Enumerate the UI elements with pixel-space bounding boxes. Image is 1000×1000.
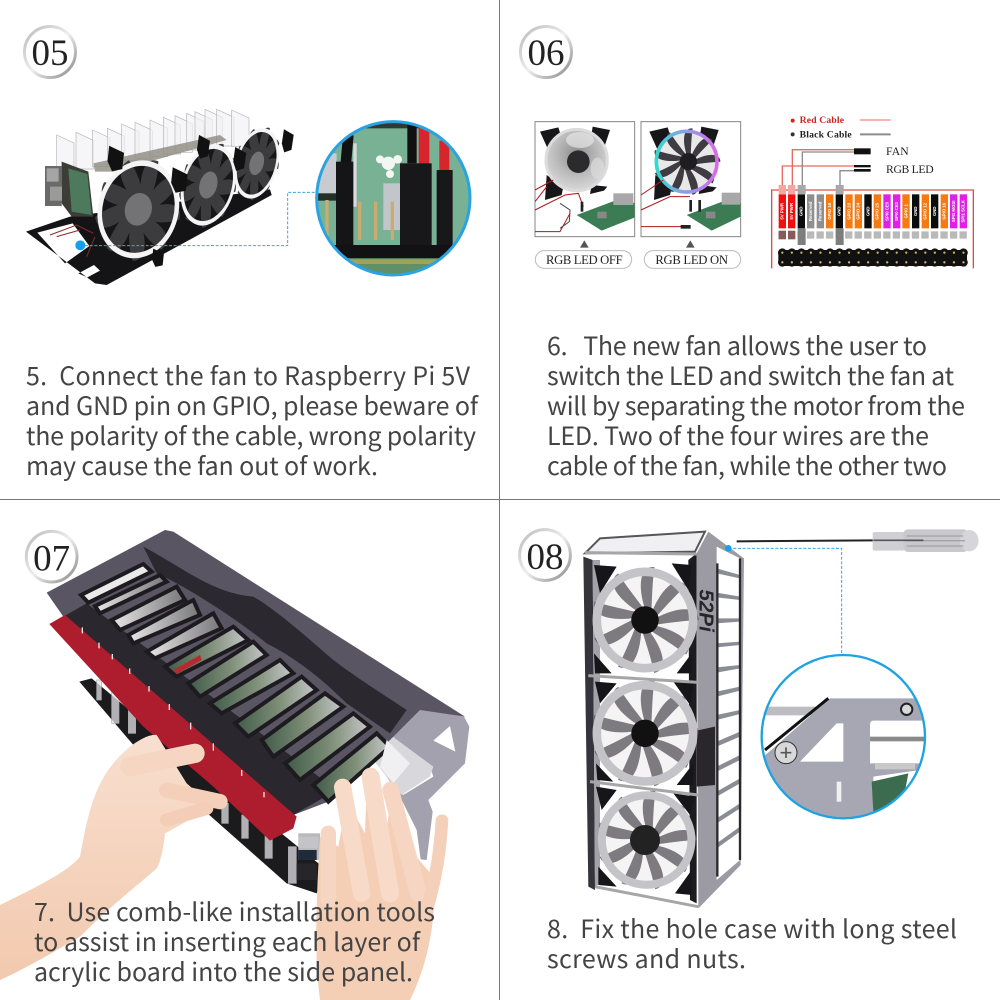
- tower front frame: [583, 532, 707, 907]
- GPIO pin label columns: GND: [932, 207, 937, 216]
- USB ports: [298, 837, 318, 860]
- dark translucent top side panel: [47, 530, 465, 815]
- lighter side panel end with cut-outs: [387, 703, 469, 860]
- fan 1: [81, 144, 196, 273]
- badge 08: 08: [527, 537, 563, 578]
- GPIO pin label columns: GPIO 12: [923, 202, 928, 220]
- step 8 text: screws and nuts.: [547, 940, 746, 976]
- photo frame: LED on: [641, 122, 741, 237]
- inset circle: fan connectors on GPIO pins: [317, 120, 473, 280]
- connector: RGB LED: [854, 163, 934, 176]
- step 7 text: [34, 893, 435, 989]
- cables by the base: [50, 225, 95, 257]
- GPIO pin label columns: GND: [913, 207, 918, 216]
- label: RGB LED OFF: RGB LED OFF: [546, 253, 623, 267]
- GPIO header pins: [778, 250, 967, 266]
- photo: tower and screwdriver: [520, 529, 979, 908]
- red board detail: [173, 655, 202, 674]
- comb pins: [82, 627, 264, 797]
- fan top: [591, 564, 701, 675]
- fan bottom hub: [630, 825, 660, 855]
- photo: assembled cluster with three fans lying on its side: [26, 109, 473, 285]
- front frame strip: [63, 603, 337, 815]
- badge 07: [26, 531, 77, 582]
- step 8 text: 8. Fix the hole case with long steel: [547, 910, 957, 946]
- badge 08: [520, 530, 570, 580]
- step 5 text: and GND pin on GPIO, please beware of: [26, 387, 479, 423]
- GPIO pin label columns: 5V PWR: [780, 202, 785, 220]
- GPIO pin label columns: Reserved: [808, 201, 813, 221]
- GPIO pin label columns: GPIO 1: [903, 204, 908, 219]
- side panel logo: 52Pi: [694, 589, 717, 633]
- fan 3: [225, 119, 296, 209]
- arrow up to LED on photo: [686, 240, 695, 248]
- step 6 text: switch the LED and switch the fan at: [547, 357, 955, 393]
- board ports stack: [45, 162, 93, 217]
- acrylic board plates: [57, 109, 249, 172]
- inset circle: screw fixed on bracket: [762, 655, 927, 818]
- label: RGB LED ON: [644, 251, 741, 268]
- lower black base plate with clear spacers: [79, 678, 327, 893]
- GPIO pin label columns: GPIO 24: [856, 202, 861, 220]
- connector: FAN: [854, 145, 909, 158]
- wires from FAN and RGB LED connectors: [782, 150, 854, 185]
- label: RGB LED ON: RGB LED ON: [655, 253, 728, 267]
- arrow up to LED off photo: [580, 240, 589, 248]
- GPIO pin label columns: SPI1 SCLK: [961, 199, 966, 223]
- connector: FAN: FAN: [886, 145, 909, 158]
- step 6 text: will by separating the motor from the: [547, 387, 965, 423]
- step 7 text: to assist in inserting each layer of: [34, 923, 421, 959]
- steel rods: [585, 553, 698, 907]
- panel 08: fixing the case with screws: [520, 529, 979, 976]
- GPIO pin label columns: GPIO 18: [827, 202, 832, 220]
- column highlights for used pins: [779, 185, 844, 245]
- GPIO pin label columns: Reserved: [818, 201, 823, 221]
- step 5 text: may cause the fan out of work.: [26, 447, 378, 483]
- step 7 text: acrylic board into the side panel.: [34, 953, 413, 989]
- GPIO pin label columns: SPI0 CE1: [894, 201, 899, 221]
- badge 07: 07: [33, 539, 70, 580]
- board windows: [81, 564, 390, 802]
- callout dot: [75, 240, 85, 250]
- GPIO pin label columns: SPI0 CE0: [884, 201, 889, 221]
- legend: black cable: Black Cable: [800, 130, 852, 141]
- photo frame: LED off: [535, 122, 637, 237]
- badge 06: [520, 26, 572, 78]
- GPIO pin label columns: GND: [837, 207, 842, 216]
- step 5 text: 5. Connect the fan to Raspberry Pi 5V: [26, 357, 471, 393]
- step 6 text: LED. Two of the four wires are the: [547, 417, 929, 453]
- fan middle: [591, 678, 701, 788]
- panel 05: connect fan to GPIO: [24, 26, 479, 483]
- screwdriver: [737, 529, 979, 552]
- panel 06: fan and LED wiring: [520, 26, 973, 483]
- panel 07: inserting boards with comb tool: [0, 530, 469, 1000]
- fan bottom: [597, 788, 699, 891]
- step 5 text: [26, 357, 479, 483]
- black acrylic base frame: [26, 189, 272, 285]
- boards seen between plates: [93, 135, 227, 172]
- right hand: [316, 777, 442, 1000]
- pin number squares: [778, 224, 968, 246]
- badge 05: [24, 26, 76, 78]
- GPIO pin label columns: GND: [865, 207, 870, 216]
- GPIO pin label columns: GPIO 25: [875, 202, 880, 220]
- step 6 text: [547, 327, 965, 483]
- white fan glimpse: [373, 733, 433, 795]
- dashed leader to inset: [85, 192, 317, 246]
- step 7 text: 7. Use comb-like installation tools: [34, 893, 435, 929]
- GPIO pin label columns: [779, 194, 967, 228]
- red comb tool: [49, 615, 297, 841]
- legend: black cable: [791, 130, 891, 141]
- GPIO pin label columns: SPI1 MOSI: [951, 201, 956, 222]
- fan 2: [169, 133, 249, 236]
- label: RGB LED OFF: [535, 251, 632, 268]
- step 8 text: [547, 910, 957, 976]
- badge 05: 05: [32, 33, 68, 74]
- badge 06: 06: [528, 33, 564, 74]
- GPIO pin label columns: GPIO 16: [942, 202, 947, 220]
- fan shadow band in top panel: [143, 547, 407, 733]
- GPIO pin label columns: GPIO 23: [846, 202, 851, 220]
- step 6 text: cable of the fan, while the other two: [547, 447, 947, 483]
- GPIO pin label columns: GND: [799, 207, 804, 216]
- legend: red cable: Red Cable: [800, 115, 845, 126]
- legend: red cable: [791, 115, 891, 126]
- pinout frame: [772, 190, 973, 268]
- connector: RGB LED: RGB LED: [886, 163, 934, 176]
- step 5 text: the polarity of the cable, wrong polarity: [26, 417, 476, 453]
- tower side panel with slats: [697, 532, 744, 908]
- photos and wiring diagram: [535, 115, 973, 268]
- photo: hands inserting boards: [0, 530, 469, 1000]
- GPIO pin label columns: 5V PWR: [789, 202, 794, 220]
- dashed leader to inset: [733, 548, 842, 655]
- left hand and arm: [0, 735, 220, 980]
- fan blades seen through the end: [380, 740, 410, 783]
- callout dot: [725, 545, 732, 552]
- fan corner brackets: [594, 563, 695, 895]
- step 6 text: 6. The new fan allows the user to: [547, 327, 927, 363]
